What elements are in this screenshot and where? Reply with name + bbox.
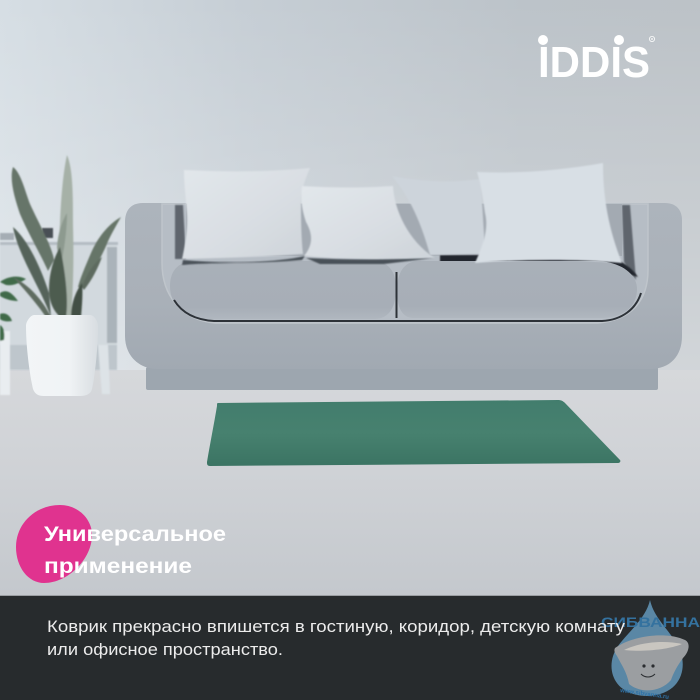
right seat cushion	[397, 261, 637, 318]
dark seam under cushions	[174, 272, 641, 321]
registered mark	[649, 36, 655, 42]
wall background	[0, 0, 700, 372]
floor	[0, 370, 700, 596]
pink blob	[16, 505, 92, 583]
pillow left	[182, 168, 310, 259]
heading: Универсальное	[44, 523, 226, 546]
sofa	[125, 163, 682, 390]
logo: iDDiS: IDDIS	[538, 38, 650, 87]
heading	[44, 523, 226, 578]
pillow back right	[392, 176, 486, 255]
sofa inner back	[162, 204, 648, 323]
watermark: sibvanna	[601, 600, 700, 700]
pillow right	[475, 163, 622, 263]
pot	[26, 315, 98, 396]
body text: или офисное пространство.	[47, 640, 283, 659]
dark gaps beside pillows	[175, 205, 636, 280]
left seat cushion	[170, 261, 396, 319]
heading: применение	[44, 555, 192, 578]
back fill behind pillows	[186, 204, 622, 256]
body text: Коврик прекрасно впишется в гостиную, коридор, детскую комнату	[47, 617, 626, 636]
plant: small plant at left edge	[0, 277, 26, 395]
caption bar	[0, 595, 700, 700]
rug	[207, 400, 624, 468]
watermark: sibvanna: СИБВАННА	[601, 614, 700, 630]
side table	[0, 228, 118, 394]
body text	[47, 617, 626, 659]
plant: snake plant in white pot	[12, 155, 121, 396]
dark band under right pillows	[440, 255, 638, 277]
leaves	[12, 155, 121, 317]
sofa body	[125, 203, 682, 369]
sofa base	[146, 367, 658, 390]
pillow centre	[301, 186, 435, 259]
